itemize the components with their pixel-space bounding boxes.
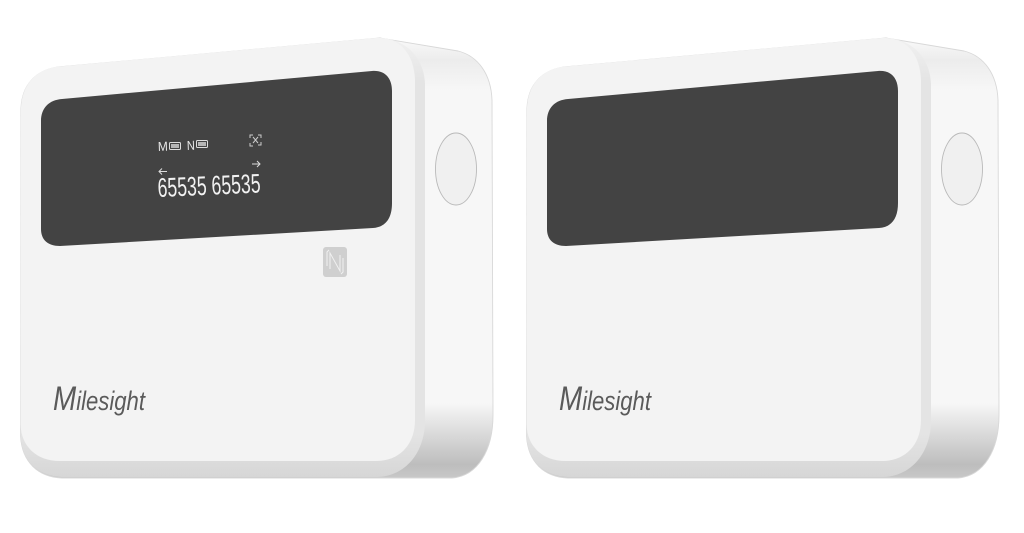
device front face — [20, 38, 415, 461]
side button — [436, 133, 476, 205]
right arrow — [252, 161, 260, 167]
NFC icon — [323, 247, 347, 277]
device bevel — [20, 38, 425, 477]
display readout — [157, 135, 261, 203]
display screen — [41, 71, 392, 246]
device: left, with display on — [20, 38, 493, 478]
device body side — [20, 38, 493, 478]
device front face — [526, 38, 921, 461]
device: right, with display off — [526, 38, 999, 478]
counter values: 65535 65535 — [157, 169, 261, 203]
device body side — [526, 38, 999, 478]
mode label N: N — [187, 138, 195, 153]
mode label M: M — [158, 139, 168, 154]
device bevel — [526, 38, 931, 477]
brand logo: Milesight — [53, 380, 146, 418]
battery icon M — [170, 142, 180, 150]
side button — [942, 133, 982, 205]
display screen — [547, 71, 898, 246]
scan icon — [250, 135, 261, 146]
left arrow — [159, 168, 167, 174]
brand logo: Milesight — [559, 380, 652, 418]
battery icon N — [196, 140, 208, 148]
